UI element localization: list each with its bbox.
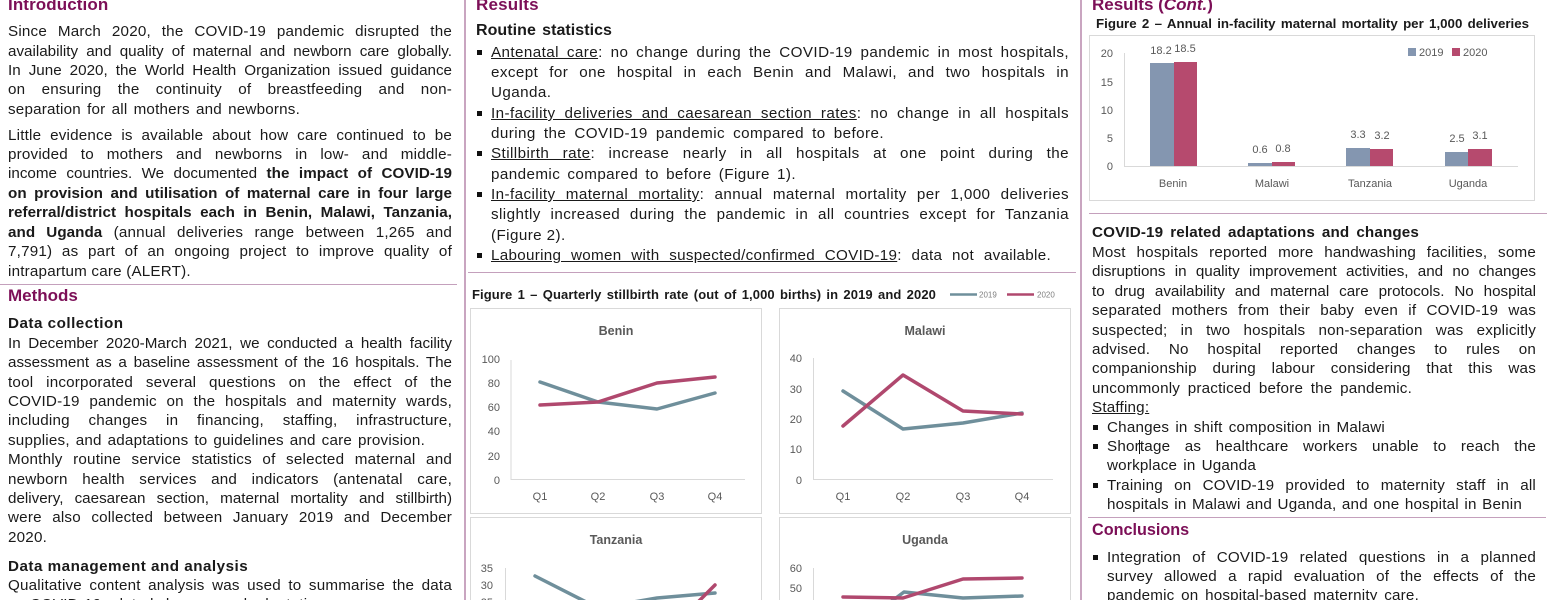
chart: Uganda stillbirth line chart: Uganda <box>902 533 949 547</box>
chart: Figure 2 bar chart of maternal mortality: 2019 <box>1419 47 1443 59</box>
text block: COVID-19 related adaptations and changes: to drug availability and maternal care protocols. No hospital <box>1092 283 1536 300</box>
bullet: maternal mortality: (Figure 2). <box>491 227 566 244</box>
list: staffing bullets: Changes in shift composition in Malawi <box>1107 419 1385 436</box>
text block: data collection: tool incorporated several questions on the effect of the <box>8 374 452 391</box>
bullet: stillbirth rate: Stillbirth rate: increase nearly in all hospitals at one point during the <box>491 145 1069 162</box>
bullet: in-facility deliveries: In-facility deliveries and caesarean section rates: no change in all hospitals <box>491 105 1069 122</box>
list: conclusions bullet: survey allowed a rapid evaluation of the effects of the <box>1107 568 1536 585</box>
text block: data collection: newborn health services and indicators (antenatal care, <box>8 471 452 488</box>
chart: Tanzania stillbirth line chart: 35 <box>481 563 493 575</box>
chart: Malawi stillbirth line chart: 10 <box>790 444 802 456</box>
chart: Tanzania stillbirth line chart: Tanzania <box>590 533 643 547</box>
chart: Tanzania stillbirth line chart: 30 <box>481 580 493 592</box>
text block: data collection: In December 2020-March 2021, we conducted a health facility <box>8 335 452 352</box>
chart: Uganda stillbirth line chart <box>779 517 1071 600</box>
text block: data management and analysis: Data management and analysis <box>8 558 248 575</box>
heading: figure 2 title: Figure 2 – Annual in-facility maternal mortality per 1,000 deliveries <box>1096 16 1529 31</box>
chart: Malawi stillbirth line chart <box>779 308 1071 514</box>
text block: introduction second paragraph <box>8 127 452 280</box>
panel: middle column, results <box>470 0 1071 600</box>
text block: introduction first paragraph: In June 2020, the World Health Organization issued guidance <box>8 62 452 79</box>
list: conclusions bullet: Integration of COVID-19 related questions in a planned <box>1107 549 1536 566</box>
text block: introduction first paragraph: Since March 2020, the COVID-19 pandemic disrupted the <box>8 23 452 40</box>
chart: Figure 2 bar chart of maternal mortality: 0.8 <box>1275 143 1291 155</box>
bullet: antenatal care: Uganda. <box>491 84 551 101</box>
legend: figure 1 <box>950 290 1055 300</box>
text block: data collection: supplies, and adaptations to guidelines and care provision. <box>8 432 425 449</box>
text block: routine statistics <box>476 22 1069 264</box>
text block: introduction first paragraph: on ensuring the continuity of breastfeeding and non- <box>8 81 452 98</box>
text block: COVID-19 related adaptations and changes: advised. No hospital reported changes to rules on <box>1092 341 1536 358</box>
chart: Benin stillbirth line chart: Q2 <box>591 491 605 503</box>
chart: Figure 2 bar chart of maternal mortality: Tanzania <box>1348 178 1393 190</box>
chart: Malawi stillbirth line chart: 40 <box>790 353 802 365</box>
heading: figure 1 title: Figure 1 – Quarterly stillbirth rate (out of 1,000 births) in 2019 and 2020 <box>472 287 936 302</box>
bullet: antenatal care: Antenatal care: no change during the COVID-19 pandemic in most hospitals, <box>491 44 1069 61</box>
panel: left column, introduction and methods <box>8 0 452 600</box>
bullet: maternal mortality <box>477 186 1069 244</box>
chart: Figure 2 bar chart of maternal mortality: 10 <box>1101 105 1113 117</box>
list: staffing bullets <box>1093 419 1536 513</box>
text block: data collection: Monthly routine service statistics of selected maternal and <box>8 451 452 468</box>
bullet: maternal mortality: slightly increased during the pandemic in all countries except for Tanzania <box>491 206 1069 223</box>
text block: introduction second paragraph: income countries. We documented the impact of COVID-19 <box>8 165 452 182</box>
text block: data collection: 2020. <box>8 529 47 546</box>
text block: introduction second paragraph: on provision and utilisation of maternal care in four large <box>8 185 452 202</box>
bullet: stillbirth rate <box>477 145 1069 183</box>
bullet: maternal mortality: In-facility maternal mortality: annual maternal mortality per 1,000 deliveries <box>491 186 1069 203</box>
chart: Figure 2 bar chart of maternal mortality: 5 <box>1107 133 1113 145</box>
list: staffing bullets: hospitals in Malawi and Uganda, and one hospital in Benin <box>1107 496 1522 513</box>
chart: Figure 2 bar chart of maternal mortality: 15 <box>1101 77 1113 89</box>
chart: Benin stillbirth line chart: 0 <box>494 475 500 487</box>
text block: COVID-19 related adaptations and changes: companionship during labour considering that this was <box>1092 360 1536 377</box>
text block: COVID-19 related adaptations and changes <box>1092 224 1536 397</box>
list: staffing bullets: Shortage as healthcare workers unable to reach the <box>1107 438 1536 455</box>
text block: data collection: COVID-19 pandemic on the hospitals and maternity wards, <box>8 393 452 410</box>
list: staffing bullets: workplace in Uganda <box>1107 457 1256 474</box>
chart: Figure 2 bar chart of maternal mortality <box>1089 35 1535 201</box>
text block: data management and analysis: Qualitative content analysis was used to summarise the data <box>8 577 452 594</box>
chart: Malawi stillbirth line chart: 0 <box>796 475 802 487</box>
text block: COVID-19 related adaptations and changes: suspected; in two hospitals non-separation was explicitly <box>1092 322 1536 339</box>
subheading: Staffing: Staffing: <box>1092 399 1149 416</box>
chart: Figure 2 bar chart of maternal mortality: 3.2 <box>1374 130 1390 142</box>
text block: COVID-19 related adaptations and changes: Most hospitals reported more handwashing facilities, some <box>1092 244 1536 261</box>
chart: Benin stillbirth line chart: 100 <box>482 354 500 366</box>
chart: Figure 2 bar chart of maternal mortality: 0.6 <box>1252 144 1268 156</box>
text block: COVID-19 related adaptations and changes: disruptions in quality improvement activities, and no changes <box>1092 263 1536 280</box>
chart: Malawi stillbirth line chart: 20 <box>790 414 802 426</box>
chart: Figure 2 bar chart of maternal mortality: 2020 <box>1463 47 1487 59</box>
chart: Malawi stillbirth line chart: Malawi <box>904 324 946 338</box>
chart: Malawi stillbirth line chart: 30 <box>790 384 802 396</box>
legend: figure 1: 2019 <box>979 290 997 300</box>
chart: Malawi stillbirth line chart: Q4 <box>1015 491 1029 503</box>
text block: introduction second paragraph: Little evidence is available about how care continued to be <box>8 127 452 144</box>
chart: Figure 2 bar chart of maternal mortality: 3.3 <box>1350 129 1366 141</box>
chart: Figure 2 bar chart of maternal mortality: Benin <box>1159 178 1187 190</box>
chart: Benin stillbirth line chart: 60 <box>488 402 500 414</box>
text block: introduction second paragraph: and Uganda (annual deliveries range between 1,265 and <box>8 224 452 241</box>
text block: introduction second paragraph: provided to mothers and newborns in low- and middle- <box>8 146 452 163</box>
chart: Figure 2 bar chart of maternal mortality: Malawi <box>1255 178 1289 190</box>
chart: Figure 2 bar chart of maternal mortality: 3.1 <box>1472 130 1488 142</box>
chart: Benin stillbirth line chart: Q4 <box>708 491 722 503</box>
chart: Benin stillbirth line chart: 20 <box>488 451 500 463</box>
bullet: labouring women: Labouring women with suspected/confirmed COVID-19: data not available. <box>491 247 1051 264</box>
text block: data collection: including changes in financing, staffing, infrastructure, <box>8 412 452 429</box>
chart: Figure 2 bar chart of maternal mortality: 18.2 <box>1150 45 1172 57</box>
chart: Benin stillbirth line chart: Benin <box>599 324 633 338</box>
chart: Benin stillbirth line chart: Q1 <box>533 491 547 503</box>
text block: introduction second paragraph: referral/district hospitals each in Benin, Malawi, Tanzania, <box>8 204 452 221</box>
text block: routine statistics: Routine statistics <box>476 22 612 39</box>
chart: Benin stillbirth line chart: Q3 <box>650 491 664 503</box>
text block: COVID-19 related adaptations and changes: uncommonly practiced before the pandemic. <box>1092 380 1412 397</box>
text block: COVID-19 related adaptations and changes: COVID-19 related adaptations and changes <box>1092 224 1419 241</box>
text block: introduction first paragraph: availability and quality of maternal and newborn care globally. <box>8 43 452 60</box>
chart: Uganda stillbirth line chart: 60 <box>790 563 802 575</box>
text block: data collection: assessment as a baseline assessment of the 16 hospitals. The <box>8 354 452 371</box>
chart: Benin stillbirth line chart: 40 <box>488 426 500 438</box>
chart: Tanzania stillbirth line chart <box>470 517 762 600</box>
text block: introduction first paragraph <box>8 23 452 118</box>
text block: data collection: delivery, caesarean section, maternal mortality and stillbirth) <box>8 490 452 507</box>
bullet: in-facility deliveries: during the COVID-19 pandemic compared to before. <box>491 125 884 142</box>
bullet: antenatal care: except for one hospital in each Benin and Malawi, and two hospitals in <box>491 64 1069 81</box>
chart: Figure 2 bar chart of maternal mortality: 20 <box>1101 48 1113 60</box>
chart: Figure 2 bar chart of maternal mortality: 2.5 <box>1449 133 1465 145</box>
text block: data collection: Data collection <box>8 315 124 332</box>
legend: figure 1: 2020 <box>1037 290 1055 300</box>
chart: Malawi stillbirth line chart: Q2 <box>896 491 910 503</box>
text block: introduction second paragraph: 7,791) as part of an ongoing project to improve quality of <box>8 243 452 260</box>
chart: Malawi stillbirth line chart: Q1 <box>836 491 850 503</box>
panel: right column, results continued and conclusions <box>1089 0 1536 600</box>
text block: data collection: were also collected between January 2019 and December <box>8 509 452 526</box>
chart: Figure 2 bar chart of maternal mortality: 0 <box>1107 161 1113 173</box>
list: staffing bullets: Training on COVID-19 provided to maternity staff in all <box>1107 477 1536 494</box>
heading: Methods: Methods <box>8 286 78 305</box>
text block: data collection <box>8 315 452 546</box>
bullet: in-facility deliveries <box>477 105 1069 142</box>
chart: Figure 2 bar chart of maternal mortality: 18.5 <box>1174 43 1196 55</box>
chart: Malawi stillbirth line chart: Q3 <box>956 491 970 503</box>
chart: Figure 2 bar chart of maternal mortality: Uganda <box>1449 178 1488 190</box>
chart: Benin stillbirth line chart: 80 <box>488 378 500 390</box>
list: conclusions bullet <box>1093 549 1536 600</box>
bullet: stillbirth rate: pandemic compared to before (Figure 1). <box>491 166 796 183</box>
chart: Benin stillbirth line chart <box>470 308 762 514</box>
chart: Uganda stillbirth line chart: 50 <box>790 583 802 595</box>
bullet: antenatal care <box>477 44 1069 101</box>
text cursor mark <box>1139 440 1140 454</box>
text block: data management and analysis <box>8 558 452 600</box>
text block: COVID-19 related adaptations and changes: separated mothers from their baby even if COVID-19 was <box>1092 302 1536 319</box>
heading: Conclusions: Conclusions <box>1092 521 1189 539</box>
text block: introduction second paragraph: intrapartum care (ALERT). <box>8 263 191 280</box>
text block: introduction first paragraph: separation for all mothers and newborns. <box>8 101 300 118</box>
